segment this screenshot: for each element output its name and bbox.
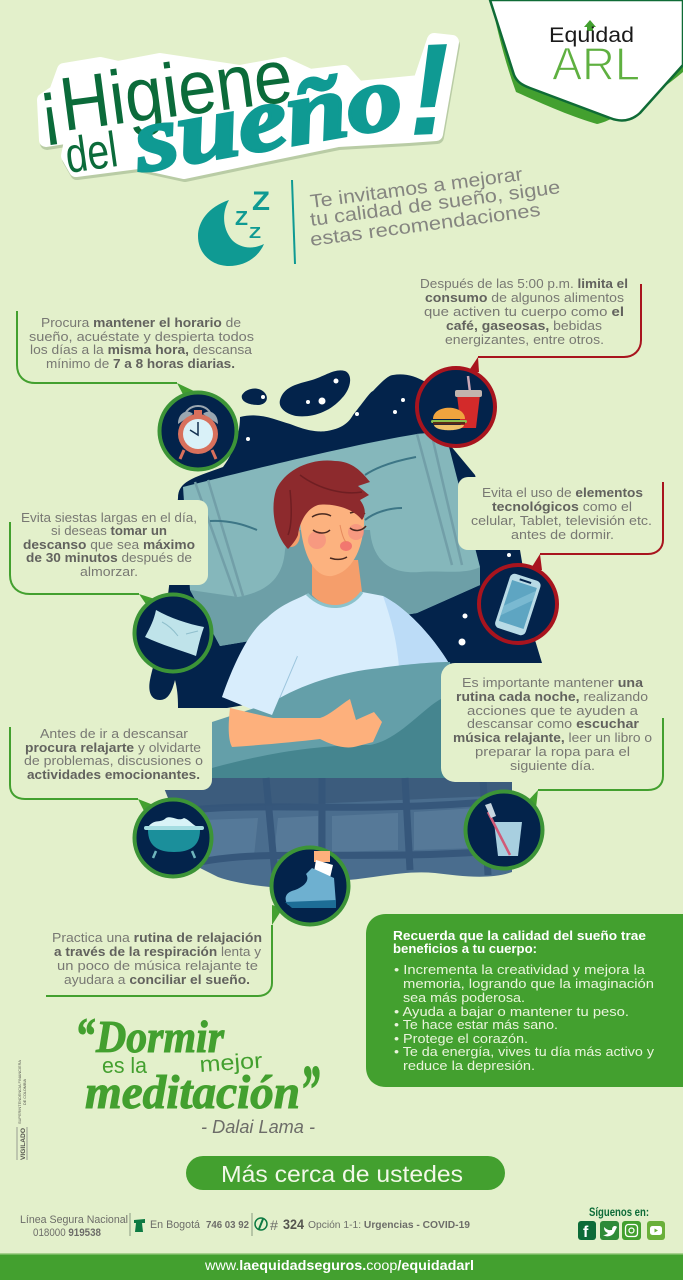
pillow [183, 433, 480, 646]
icon: bathtub [134, 800, 212, 876]
quote: Dormir es la mejor meditación: ” [300, 1052, 320, 1129]
panel: beneficios: • Te hace estar más sano. [394, 1017, 558, 1032]
callout: rutina cada noche: preparar la ropa para el [475, 744, 630, 759]
callout: limita el consumo: energizantes, entre otros. [445, 332, 604, 347]
divider [292, 180, 295, 264]
callout: respiración: ayudara a conciliar el sueño. [64, 972, 250, 987]
callout: respiración [46, 905, 283, 996]
callout: limita el consumo: café, gaseosas, bebidas [446, 318, 603, 333]
callout: respiración: un poco de música relajante te [57, 958, 258, 973]
quote: Dormir es la mejor meditación: mejor [199, 1048, 263, 1077]
callout: rutina cada noche: acciones que te ayuden a [467, 703, 639, 718]
callout: horario de sueño: los días a la misma hora, descansa [30, 342, 253, 357]
panel: beneficios: • Incrementa la creatividad y mejora la [394, 962, 646, 977]
callout: siestas: descanso que sea máximo [23, 537, 195, 552]
callout: elementos tecnológicos: antes de dormir. [511, 527, 614, 542]
panel: beneficios: • Te da energía, vives tu día más activo y [394, 1044, 655, 1059]
icon: moon with Z letters: Z [235, 208, 248, 230]
panel: beneficios [366, 914, 683, 1087]
callout: rutina cada noche [441, 663, 663, 808]
icon: moon with Z letters [198, 186, 270, 266]
callout: relajarte: actividades emocionantes. [27, 767, 200, 782]
website bar [0, 1253, 683, 1280]
illustration: sleeping person [149, 370, 542, 888]
stars [246, 378, 511, 646]
icon: burger and soda [417, 368, 495, 446]
vigilado seal: DE COLOMBIA [23, 1078, 27, 1105]
panel: beneficios: sea más poderosa. [403, 990, 525, 1005]
callout: relajarte [10, 721, 212, 815]
panel: beneficios: Recuerda que la calidad del sueño trae [393, 928, 646, 943]
callout: respiración: Practica una rutina de relajación [52, 930, 262, 945]
title: Higiene del sueño [32, 16, 453, 192]
callout: siestas: si deseas tomar un [51, 523, 167, 538]
callout: horario de sueño [17, 311, 255, 400]
subtitle text: tu calidad de sueño, sigue [309, 177, 561, 231]
website bar: www.laequidadseguros. coop/equidadarl [204, 1258, 474, 1273]
title: Higiene del sueño: del [62, 121, 121, 184]
quote: Dormir es la mejor meditación: Dormir [95, 1011, 225, 1062]
contact line [20, 1213, 470, 1239]
contact line: 324 [283, 1216, 304, 1232]
subtitle text [309, 164, 561, 251]
icon: alarm clock [160, 392, 236, 470]
contact line: # [270, 1217, 278, 1233]
plaid blanket [160, 778, 512, 888]
social icons: Síguenos en: [589, 1205, 649, 1219]
panel: beneficios: memoria, logrando que la imaginación [403, 976, 654, 991]
callout: siestas [10, 500, 208, 610]
title: Higiene del sueño: sueño [125, 44, 409, 192]
neck and face [312, 560, 362, 605]
panel: beneficios: reduce la depresión. [403, 1058, 535, 1073]
callout: horario de sueño: mínimo de 7 a 8 horas diarias. [46, 356, 235, 371]
slogan pill [186, 1156, 505, 1190]
quote: Dormir es la mejor meditación: - Dalai Lama - [201, 1117, 315, 1137]
vigilado seal: VIGILADO [21, 1128, 27, 1160]
contact line: Línea Segura Nacional [20, 1214, 128, 1226]
social icons: f [583, 1224, 589, 1241]
shirt [222, 592, 450, 718]
title: Higiene del sueño: ¡Higiene [32, 33, 297, 151]
callout: rutina cada noche: rutina cada noche, realizando [456, 689, 648, 704]
quote: Dormir es la mejor meditación [75, 1007, 320, 1137]
callout: relajarte: procura relajarte y olvidarte [25, 740, 201, 755]
logo: Equidad ARL: ARL [552, 38, 640, 90]
icon: toothbrush in glass [466, 792, 542, 868]
quote: Dormir es la mejor meditación: meditación [85, 1066, 300, 1119]
quote: Dormir es la mejor meditación: es la [102, 1053, 148, 1078]
logo: Equidad ARL: Equidad [549, 24, 634, 47]
callout: rutina cada noche: música relajante, leer un libro o [453, 730, 652, 745]
callout: elementos tecnológicos [458, 477, 663, 570]
callout: limita el consumo: que activen tu cuerpo como el [424, 304, 624, 319]
callout: respiración: a través de la respiración lenta y [54, 944, 262, 959]
icon: moon with Z letters: Z [252, 186, 270, 216]
title: Higiene del sueño: ! [405, 16, 453, 163]
callout: rutina cada noche: descansar como escuchar [467, 716, 639, 731]
panel: beneficios: • Protege el corazón. [394, 1031, 528, 1046]
callout: siestas: Evita siestas largas en el día, [21, 510, 197, 525]
blanket [212, 662, 470, 785]
hair [273, 461, 370, 549]
quote: Dormir es la mejor meditación: “ [75, 1007, 95, 1063]
callout: elementos tecnológicos: Evita el uso de elementos [482, 485, 643, 500]
icon: moon with Z letters: Z [249, 225, 261, 242]
callout: limita el consumo: Después de las 5:00 p.m. limita el [420, 276, 628, 291]
callout: limita el consumo: consumo de algunos alimentos [425, 290, 625, 305]
vigilado seal: SUPERINTENDENCIA FINANCIERA [18, 1059, 22, 1124]
contact line: Opción 1-1: Urgencias - COVID-19 [308, 1219, 470, 1231]
sleeve [222, 640, 297, 715]
icon: pillow [134, 594, 212, 672]
logo: Equidad ARL [490, 0, 683, 124]
callout: relajarte: de problemas, discusiones o [24, 753, 203, 768]
callout: elementos tecnológicos: tecnológicos como el [492, 499, 632, 514]
panel: beneficios: beneficios a tu cuerpo: [393, 941, 537, 956]
callout: horario de sueño: sueño, acuéstate y despierta todos [29, 329, 255, 344]
night sky blob [149, 370, 542, 708]
icon: smartphone [479, 565, 557, 643]
callout: siestas: almorzar. [80, 564, 138, 579]
slogan pill: Más cerca de ustedes [221, 1161, 463, 1187]
contact line: 746 03 92 [206, 1220, 249, 1231]
social icons [578, 1205, 665, 1241]
callout: horario de sueño: Procura mantener el horario de [41, 315, 241, 330]
callout: rutina cada noche: siguiente día. [510, 758, 595, 773]
arm and hand [229, 699, 382, 747]
subtitle text: Te invitamos a mejorar [309, 164, 525, 213]
callout: elementos tecnológicos: celular, Tablet, televisión etc. [471, 513, 652, 528]
callout: rutina cada noche: Es importante mantener una [462, 675, 644, 690]
callout: limita el consumo [420, 276, 641, 372]
subtitle text: estas recomendaciones [309, 200, 542, 251]
callout: siestas: de 30 minutos después de [26, 550, 192, 565]
icon: shoe [272, 848, 348, 924]
contact line: 018000 919538 [33, 1227, 101, 1239]
callout: relajarte: Antes de ir a descansar [40, 726, 189, 741]
contact line: En Bogotá [150, 1219, 201, 1231]
vigilado seal [17, 1059, 27, 1160]
panel: beneficios: • Ayuda a bajar o mantener tu peso. [394, 1004, 629, 1019]
